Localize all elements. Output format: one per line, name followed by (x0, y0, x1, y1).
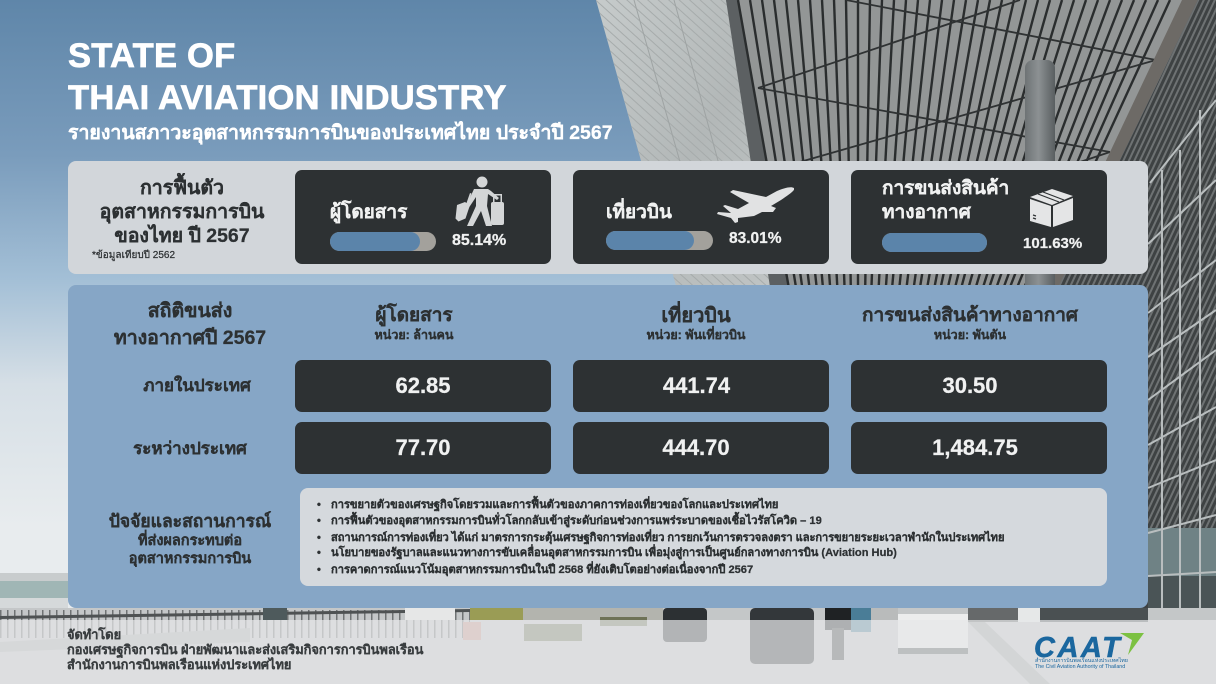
footer credit: กองเศรษฐกิจการบิน ฝ่ายพัฒนาและส่งเสริมกิจการการบินพลเรือน (67, 642, 423, 657)
column unit: หน่วย: พันเที่ยวบิน (647, 328, 745, 342)
factor 5: • (317, 564, 321, 576)
recovery heading: การฟื้นตัว (140, 177, 224, 199)
card label: การขนส่งสินค้า (882, 178, 1009, 199)
panel: air transport statistics (68, 285, 1148, 608)
footer credit: จัดทำโดย (67, 627, 121, 642)
factor 2: การฟื้นตัวของอุตสาหกรรมการบินทั่วโลกกลับเข้าสู่ระดับก่อนช่วงการแพร่ระบาดของเชื้อไวรัสโควิด – 19 (331, 515, 822, 527)
row label: international: ระหว่างประเทศ (133, 439, 247, 458)
subtitle: รายงานสภาวะอุตสาหกรรมการบินของประเทศไทย ประจำปี 2567 (68, 122, 613, 144)
recovery heading: อุตสาหกรรมการบิน (100, 201, 264, 223)
factor 5: การคาดการณ์แนวโน้มอุตสาหกรรมการบินในปี 2568 ที่ยังเติบโตอย่างต่อเนื่องจากปี 2567 (331, 564, 753, 576)
factors heading (109, 511, 272, 567)
factor 3: • (317, 532, 321, 544)
factor 2: • (317, 515, 321, 527)
icon: airplane (717, 187, 794, 223)
column header: passengers (374, 302, 454, 342)
value: domestic cargo (851, 360, 1107, 412)
progress bar 85.14% (330, 232, 436, 251)
factor 1: การขยายตัวของเศรษฐกิจโดยรวมและการฟื้นตัวของภาคการท่องเที่ยวของโลกและประเทศไทย (331, 499, 778, 511)
logo: CAAT (1034, 632, 1144, 670)
value: international passengers: 77.70 (395, 435, 451, 460)
statistics heading (114, 300, 266, 349)
factors heading subtitle (129, 530, 252, 567)
row label: domestic: ภายในประเทศ (143, 376, 251, 395)
percentage value: 85.14% (452, 232, 506, 249)
card label: ผู้โดยสาร (330, 202, 407, 223)
column unit: หน่วย: ล้านคน (375, 328, 453, 342)
factor 1: • (317, 499, 321, 511)
column title: ผู้โดยสาร (375, 305, 453, 326)
logo swoosh (1120, 633, 1144, 655)
value: domestic passengers (295, 360, 551, 412)
value: international cargo (851, 422, 1107, 474)
factor 3: สถานการณ์การท่องเที่ยว ได้แก่ มาตรการกระตุ้นเศรษฐกิจการท่องเที่ยว การยกเว้นการตรวจลงตรา และการขยายระยะเวลาพำนักในประเทศไทย (331, 532, 1004, 544)
card label (882, 178, 1009, 223)
heading line 1: STATE OF (68, 37, 235, 75)
statistics heading: ทางอากาศปี 2567 (114, 327, 266, 349)
factors heading subtitle: ที่ส่งผลกระทบต่อ (138, 533, 242, 549)
percentage value: 101.63% (1023, 235, 1082, 252)
recovery heading: ของไทย ปี 2567 (114, 225, 250, 247)
value: international flights (573, 422, 829, 474)
card: passengers recovery (295, 170, 551, 264)
column title: เที่ยวบิน (661, 305, 731, 327)
title (68, 37, 613, 145)
factors heading title: ปัจจัยและสถานการณ์ (109, 511, 271, 531)
factor 4: • (317, 547, 321, 559)
panel: recovery of the aviation industry (68, 161, 1148, 274)
column header: flights (646, 301, 746, 342)
value: domestic flights (573, 360, 829, 412)
value: domestic passengers: 62.85 (395, 373, 451, 398)
factors list (300, 488, 1107, 586)
column header: air cargo (862, 304, 1078, 342)
icon: traveller with luggage (456, 176, 504, 226)
value: international passengers (295, 422, 551, 474)
progress bar 101.63% (882, 233, 987, 252)
factors heading subtitle: อุตสาหกรรมการบิน (129, 551, 251, 567)
icon: cargo box (1030, 189, 1073, 227)
column unit: หน่วย: พันตัน (934, 328, 1006, 342)
footer credit: สำนักงานการบินพลเรือนแห่งประเทศไทย (67, 657, 291, 672)
card label: เที่ยวบิน (606, 202, 672, 223)
value: international flights: 444.70 (662, 435, 730, 460)
heading line 2: THAI AVIATION INDUSTRY (68, 79, 507, 117)
logo Thai name: สำนักงานการบินพลเรือนแห่งประเทศไทย (1035, 658, 1128, 664)
value: international cargo: 1,484.75 (932, 435, 1018, 460)
percentage value: 83.01% (729, 230, 782, 247)
column title: การขนส่งสินค้าทางอากาศ (862, 305, 1078, 326)
card: flights recovery (573, 170, 829, 264)
recovery footnote: *ข้อมูลเทียบปี 2562 (92, 250, 175, 261)
footer credit (67, 626, 424, 672)
recovery heading (100, 172, 264, 247)
value: domestic flights: 441.74 (663, 373, 730, 398)
progress bar 83.01% (606, 231, 713, 250)
card label: ทางอากาศ (882, 202, 971, 223)
card: air cargo recovery (851, 170, 1107, 264)
logo English name: The Civil Aviation Authority of Thailand (1035, 664, 1125, 670)
value: domestic cargo: 30.50 (942, 373, 998, 398)
statistics heading: สถิติขนส่ง (148, 300, 232, 322)
factor 4: นโยบายของรัฐบาลและแนวทางการขับเคลื่อนอุตสาหกรรมการบิน เพื่อมุ่งสู่การเป็นศูนย์กลางทางการบิน (Aviation Hub) (331, 547, 897, 559)
logo wordmark: CAAT (1034, 632, 1122, 664)
